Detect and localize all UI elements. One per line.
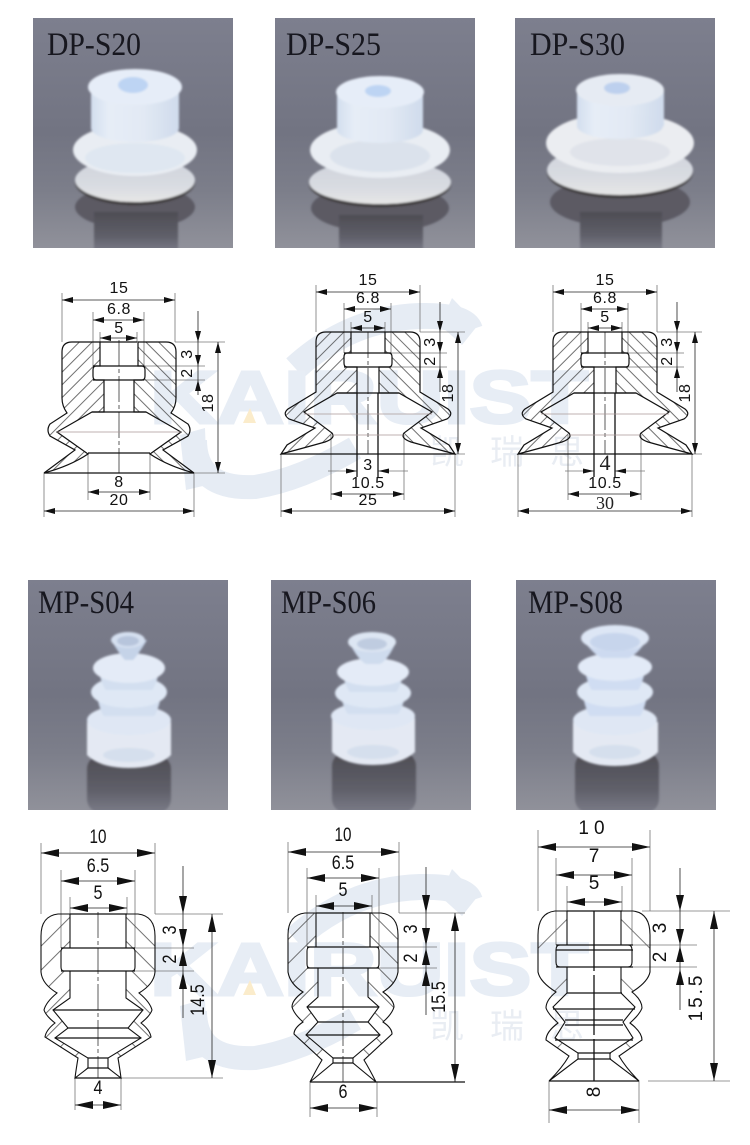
watermark: lower KAIRUISI logo: KAIRUIST (150, 928, 588, 1011)
diagram: MP-S08 (538, 818, 730, 1123)
diagram: DP-S20: 2 (179, 368, 196, 378)
watermark: upper KAIRUISI logo: KAIRUIST (150, 356, 588, 439)
diagram: DP-S25: 3 (363, 457, 373, 474)
watermark: upper KAIRUISI logo (150, 298, 588, 490)
diagram: MP-S06: 10 (335, 823, 351, 845)
watermark: lower KAIRUISI logo (150, 869, 588, 1061)
diagram: DP-S25: 5 (363, 309, 373, 326)
panel: photo MP-S08 (516, 580, 716, 810)
diagram: DP-S25: 2 (422, 356, 439, 366)
diagram: MP-S04 (41, 825, 223, 1110)
diagram: MP-S08: 15.5 (686, 973, 707, 1021)
icon: bellows cup MP-S04 (87, 632, 171, 768)
watermark: upper KAIRUISI logo: 思 (550, 434, 584, 472)
diagram: DP-S25: 18 (440, 384, 457, 402)
diagram: MP-S04: 3 (159, 925, 180, 934)
panel: photo MP-S06 (271, 580, 471, 810)
diagram: MP-S06: 6.5 (332, 852, 354, 873)
diagram: MP-S08: 8 (584, 1087, 605, 1097)
title DP-S20: DP-S20 (47, 27, 141, 63)
icon: reflection DP-S20 (75, 185, 195, 252)
panel: photo DP-S30 (515, 18, 715, 248)
diagram: DP-S20: 15 (110, 280, 128, 297)
diagram: DP-S30: 4 (600, 450, 610, 475)
watermark: lower KAIRUISI logo: 思 (550, 1008, 584, 1046)
icon: bellows cup MP-S08 (573, 625, 658, 766)
diagram: MP-S04: 10 (90, 825, 106, 847)
diagram: DP-S25: 25 (358, 492, 378, 509)
watermark: lower KAIRUISI logo: 凯 (430, 1008, 464, 1046)
diagram: DP-S20: 20 (110, 492, 128, 509)
diagram: DP-S25: 3 (422, 337, 439, 347)
title MP-S08: MP-S08 (528, 585, 623, 621)
diagram: MP-S06: 15.5 (428, 981, 449, 1013)
watermark: lower KAIRUISI logo: 瑞 (490, 1008, 524, 1046)
diagram: MP-S08: 5 (589, 873, 599, 894)
icon: reflection DP-S25 (311, 184, 449, 251)
panel: photo MP-S04 (28, 580, 228, 810)
title DP-S30: DP-S30 (530, 27, 625, 63)
diagram: DP-S25: 15 (358, 272, 378, 289)
diagram: MP-S06: 5 (339, 879, 348, 900)
diagram: MP-S06 (288, 823, 465, 1117)
diagram: MP-S06: 3 (400, 924, 421, 933)
diagram: DP-S20 (44, 280, 225, 517)
diagram: MP-S06: 6 (339, 1081, 348, 1102)
icon: reflection MP-S06 (332, 752, 416, 813)
diagram: DP-S30: 3 (659, 337, 676, 347)
diagram: DP-S30: 18 (677, 384, 694, 402)
diagram: DP-S25: 6.8 (356, 290, 380, 307)
diagram: MP-S06: 2 (400, 954, 421, 962)
diagram: DP-S20: 3 (179, 349, 196, 359)
diagram: MP-S08: 10 (578, 818, 610, 839)
icon: suction cup DP-S20 (73, 69, 197, 205)
diagram: DP-S20: 8 (114, 474, 124, 491)
diagram: MP-S04: 2 (159, 955, 180, 963)
diagram: MP-S04: 5 (94, 882, 103, 903)
diagram: DP-S30 (518, 272, 702, 517)
icon: suction cup DP-S30 (546, 74, 694, 198)
title DP-S25: DP-S25 (286, 27, 381, 63)
diagram: MP-S04: 14.5 (187, 984, 208, 1016)
diagram: DP-S30: 15 (596, 272, 614, 289)
diagram: DP-S20: 18 (200, 394, 217, 412)
diagram: MP-S04: 4 (94, 1077, 103, 1098)
icon: reflection MP-S04 (87, 755, 171, 813)
watermark: upper KAIRUISI logo: 凯 (430, 434, 464, 472)
diagram: DP-S30: 10.5 (588, 475, 622, 492)
diagram: DP-S30: 30 (596, 493, 614, 513)
diagram: MP-S08: 2 (650, 952, 671, 962)
icon: reflection MP-S08 (575, 752, 659, 813)
title MP-S06: MP-S06 (281, 585, 376, 621)
watermark: upper KAIRUISI logo: 瑞 (490, 434, 524, 472)
panel: photo DP-S25 (275, 18, 475, 248)
diagram: MP-S08: 7 (589, 846, 599, 867)
diagram: MP-S04: 6.5 (87, 855, 109, 876)
icon: reflection DP-S30 (550, 177, 690, 250)
diagram: DP-S25: 10.5 (351, 475, 385, 492)
diagram: DP-S25 (281, 272, 465, 517)
panel: photo DP-S20 (33, 18, 233, 248)
icon: suction cup DP-S25 (309, 76, 451, 207)
diagram: DP-S20: 6.8 (107, 301, 131, 318)
diagram: DP-S30: 6.8 (593, 290, 617, 307)
diagram: DP-S20: 5 (114, 320, 124, 337)
diagram: DP-S30: 2 (659, 356, 676, 366)
diagram: MP-S08: 3 (650, 923, 671, 933)
icon: bellows cup MP-S06 (331, 632, 415, 765)
title MP-S04: MP-S04 (38, 585, 134, 621)
diagram: DP-S30: 5 (600, 309, 610, 326)
